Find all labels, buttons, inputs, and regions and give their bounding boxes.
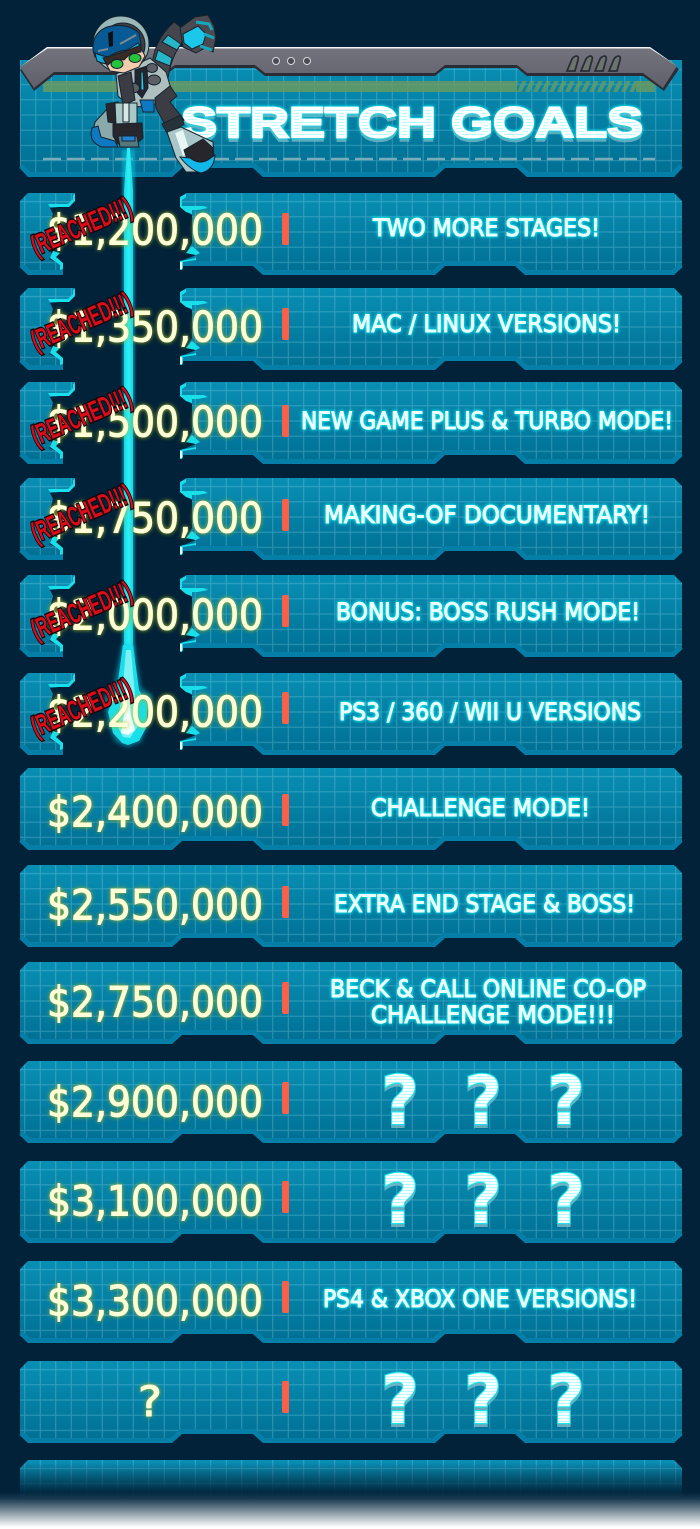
goal amounts: $1,750,000 (47, 494, 263, 542)
goal amounts: $3,100,000 (47, 1176, 263, 1226)
shoulder arm (118, 72, 135, 105)
header metal bar (20, 47, 677, 88)
back leg (91, 102, 122, 147)
mystery question marks (381, 1062, 585, 1443)
goal amounts: $2,550,000 (47, 880, 263, 930)
header panel body (20, 60, 682, 177)
right leg (155, 86, 184, 135)
goal amounts: $1,500,000 (47, 398, 263, 446)
question mark shadows: ? (464, 1065, 502, 1144)
question mark glyphs: ? (547, 1062, 585, 1141)
goal descriptions: PS4 & XBOX ONE VERSIONS! (323, 1285, 637, 1313)
goal descriptions: NEW GAME PLUS & TURBO MODE! (301, 407, 673, 435)
bottom white fade (0, 1462, 700, 1529)
goal amounts: $3,300,000 (47, 1276, 263, 1326)
goal amounts: $2,000,000 (47, 590, 263, 640)
beam glow (122, 150, 135, 660)
question mark glyphs: ? (547, 1361, 585, 1440)
header green strip (43, 81, 655, 92)
goal amounts (47, 206, 263, 1426)
goal amounts: $2,750,000 (47, 978, 263, 1026)
torso (116, 58, 172, 112)
question mark shadows: ? (381, 1364, 419, 1443)
front leg (113, 103, 143, 147)
question mark shadows: ? (547, 1164, 585, 1243)
goal amounts: ? (138, 1377, 162, 1426)
metal bar highlight (20, 47, 677, 67)
mascot character (91, 15, 216, 173)
question mark glyphs: ? (464, 1361, 502, 1440)
metal bar dots (272, 58, 310, 64)
question mark shadows: ? (547, 1364, 585, 1443)
question mark shadows: ? (464, 1164, 502, 1243)
goal descriptions: TWO MORE STAGES! (372, 214, 600, 242)
glove (180, 15, 216, 53)
question mark shadows: ? (464, 1364, 502, 1443)
goal descriptions: BONUS: BOSS RUSH MODE! (336, 598, 640, 626)
question mark shadows: ? (381, 1065, 419, 1144)
beam core (124, 148, 133, 660)
red divider bars (282, 213, 289, 1413)
goal descriptions: CHALLENGE MODE! (371, 794, 590, 822)
goal descriptions: EXTRA END STAGE & BOSS! (334, 890, 635, 918)
goal amounts: $1,200,000 (47, 206, 263, 254)
goal descriptions: PS3 / 360 / WII U VERSIONS (339, 698, 641, 726)
title: stretch goals (181, 99, 643, 151)
question mark glyphs: ? (381, 1361, 419, 1440)
question mark glyphs: ? (381, 1161, 419, 1240)
beam flame (104, 645, 152, 747)
reached stamps: (REACHED!!!) (26, 478, 136, 548)
question mark shadows: ? (547, 1065, 585, 1144)
reached stamps: (REACHED!!!) (26, 575, 136, 645)
goal descriptions: MAKING-OF DOCUMENTARY! (324, 501, 650, 529)
header bottom trim (21, 166, 681, 174)
question mark shadows (381, 1065, 585, 1443)
reached stamps: (REACHED!!!) (26, 672, 136, 742)
panel: header (20, 47, 682, 177)
helmet (93, 16, 149, 73)
raised arm (152, 22, 190, 78)
question mark glyphs (381, 1062, 585, 1440)
reached stamps: (REACHED!!!) (26, 381, 136, 451)
header panel grid (20, 60, 682, 177)
header dashed line (43, 158, 655, 160)
goal amounts: $1,350,000 (47, 302, 263, 352)
header metal bar shadow (20, 50, 679, 91)
metal bar vents (567, 56, 620, 71)
goal amounts: $2,900,000 (47, 1078, 263, 1126)
question mark glyphs: ? (381, 1062, 419, 1141)
question mark glyphs: ? (464, 1161, 502, 1240)
title shadow: STRETCH GOALS (181, 103, 643, 151)
goal descriptions: MAC / LINUX VERSIONS! (352, 310, 621, 338)
reached stamps (26, 191, 136, 742)
goal descriptions: CHALLENGE MODE!!! (371, 1001, 615, 1029)
question mark glyphs: ? (547, 1161, 585, 1240)
goal amounts: $2,200,000 (47, 688, 263, 736)
title text: STRETCH GOALS (181, 99, 643, 147)
goal descriptions: BECK & CALL ONLINE CO-OP (330, 975, 646, 1003)
boot (167, 127, 215, 173)
question mark shadows: ? (381, 1164, 419, 1243)
reached stamps: (REACHED!!!) (26, 191, 136, 261)
goal descriptions (301, 214, 673, 1313)
rocket beam (104, 148, 152, 747)
question mark glyphs: ? (464, 1062, 502, 1141)
reached stamps: (REACHED!!!) (26, 286, 136, 356)
goal amounts: $2,400,000 (47, 788, 263, 836)
